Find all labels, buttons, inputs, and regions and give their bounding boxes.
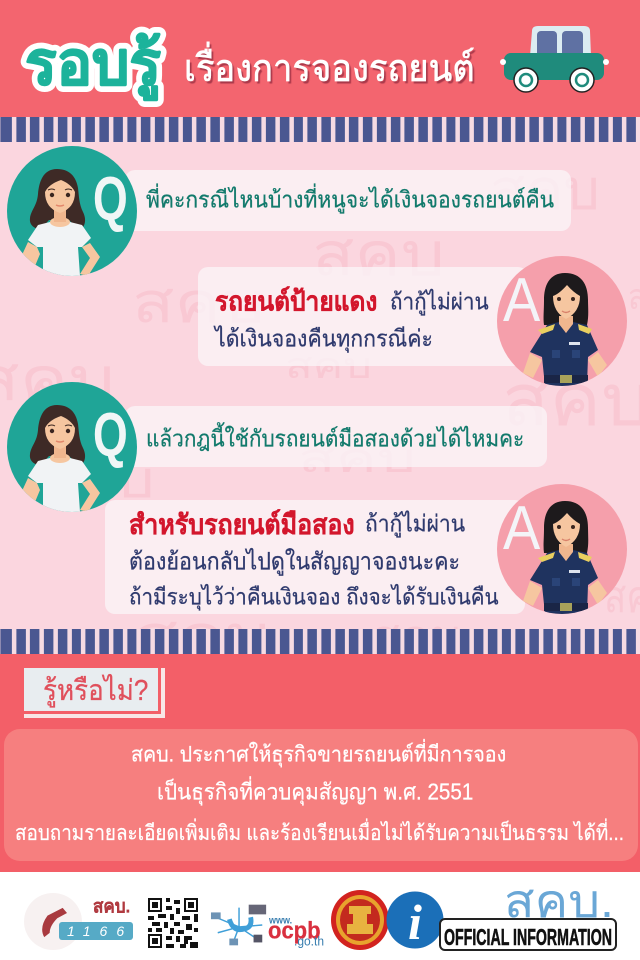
icon: woman question 2	[7, 382, 137, 512]
logo: 1166 hotline: สคบ.	[93, 896, 130, 917]
letter Q 2: Q	[93, 401, 128, 470]
letter A 2: A	[503, 494, 540, 563]
watermark text: สคบ	[30, 452, 155, 508]
answer text 1	[213, 286, 489, 353]
logo: ocpb website: .go.th	[294, 933, 324, 949]
watermark text: สคบ	[312, 221, 445, 288]
logo: official information	[439, 884, 617, 951]
watermark text: สคบ	[285, 345, 372, 386]
answer text 2: ถ้ามีระบุไว้ว่าคืนเงินจอง ถึงจะได้รับเงินคืน	[129, 585, 499, 610]
info line 2: เป็นธุรกิจที่ควบคุมสัญญา พ.ศ. 2551	[157, 780, 473, 805]
question text 2: แล้วกฎนี้ใช้กับรถยนต์มือสองด้วยได้ไหมคะ	[146, 427, 524, 452]
answer text 1: ถ้ากู้ไม่ผ่าน	[390, 290, 489, 315]
footer-top red panel	[0, 654, 640, 872]
title badge: รอบรู้	[25, 30, 161, 101]
logo: 1166 hotline: 1166	[67, 923, 133, 939]
answer bubble 1	[198, 267, 528, 366]
logo: ocpb website: www.	[269, 914, 292, 926]
icon: officer answer 2	[497, 484, 627, 614]
logo: ocpb website: ocpb	[268, 917, 321, 944]
top stripe	[0, 117, 640, 142]
watermark text: สคบ	[132, 271, 265, 334]
logo: 1166 hotline	[24, 893, 133, 950]
watermark text: สคบ	[490, 158, 600, 221]
answer bubble 2	[105, 500, 525, 614]
title badge: รอบรู้	[25, 30, 161, 101]
info line 1: สคบ. ประกาศให้ธุรกิจขายรถยนต์ที่มีการจอง	[131, 743, 506, 767]
icon: car	[500, 26, 609, 93]
letter Q 1: Q	[93, 165, 128, 234]
watermark text	[0, 158, 640, 654]
bottom stripe	[0, 629, 640, 654]
watermark text: สคบ	[298, 437, 416, 481]
header band	[0, 0, 640, 117]
icon: info i	[386, 892, 444, 949]
icon: officer answer 1	[497, 256, 627, 386]
icon: woman question 1	[7, 146, 137, 276]
title text: เรื่องการจองรถยนต์	[184, 48, 475, 90]
did you know tag	[24, 668, 165, 718]
info panel	[4, 729, 638, 861]
answer text 2: ต้องย้อนกลับไปดูในสัญญาจองนะคะ	[129, 549, 460, 575]
answer text 2: ถ้ากู้ไม่ผ่าน	[365, 512, 465, 537]
qr code	[148, 898, 198, 948]
letter A 1: A	[503, 266, 540, 335]
pink content panel	[0, 142, 640, 654]
answer text 2: สำหรับรถยนต์มือสอง	[129, 510, 355, 540]
icon: info i: i	[408, 894, 422, 949]
question text 1: พี่คะกรณีไหนบ้างที่หนูจะได้เงินจองรถยนต์คืน	[146, 188, 554, 213]
answer text 2	[129, 509, 499, 611]
answer text 1: ได้เงินจองคืนทุกกรณีค่ะ	[215, 326, 433, 352]
question bubble 2	[125, 406, 547, 467]
logo: ocpb seal	[331, 890, 388, 950]
question bubble 1	[125, 170, 571, 231]
logo: ocpb website	[210, 904, 324, 949]
tag text: รู้หรือไม่?	[43, 674, 148, 706]
answer text 1: รถยนต์ป้ายแดง	[215, 288, 377, 317]
